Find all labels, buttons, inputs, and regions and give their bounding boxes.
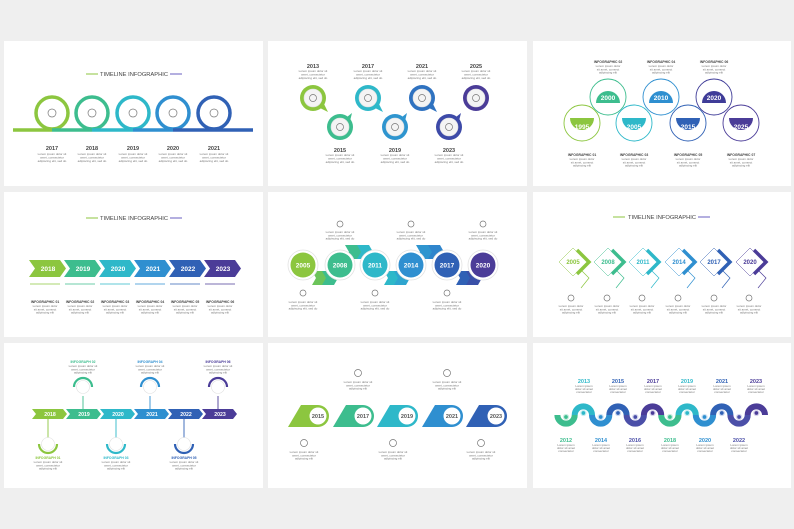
labels: sit amet, consect	[597, 67, 619, 71]
wave labels: consectetur	[576, 390, 592, 394]
icons and notes: adipiscing elit	[633, 311, 651, 315]
icons and notes: Lorem ipsum dolor	[737, 304, 761, 308]
title: TIMELINE INFOGRAPHIC	[628, 215, 696, 221]
icons and notes: adipiscing elit, sed do	[469, 237, 498, 241]
labels: INFOGRAPHIC 07	[727, 153, 755, 157]
wave labels: 2021	[716, 379, 728, 385]
wave labels: Lorem ipsum	[730, 443, 748, 447]
labels: adipiscing elit, sed do	[435, 160, 464, 164]
labels: adipiscing elit	[705, 71, 723, 75]
chevrons: 2022	[181, 266, 196, 273]
half discs with years: 2025	[734, 124, 749, 131]
icons and notes: amet, consectetur	[435, 383, 459, 387]
pin labels: Lorem ipsum dolor sit	[69, 364, 97, 368]
labels: 2015	[334, 148, 346, 154]
year circles: 2017	[440, 262, 455, 270]
labels: INFOGRAPHIC 03	[101, 300, 129, 304]
pin labels: INFOGRAPH 03	[103, 456, 129, 460]
labels: Lorem ipsum dolor sit	[408, 69, 436, 73]
year labels	[38, 146, 229, 163]
labels: 2023	[443, 148, 455, 154]
labels: 2017	[362, 64, 374, 70]
icons and notes	[559, 295, 761, 315]
year labels: adipiscing elit, sed do	[200, 159, 229, 163]
labels: INFOGRAPHIC 04	[136, 300, 164, 304]
icons and notes: Lorem ipsum dolor sit	[361, 300, 389, 304]
labels: sit amet, consect	[571, 160, 593, 164]
icons and notes: adipiscing elit	[598, 311, 616, 315]
labels: sit amet, consect	[139, 307, 161, 311]
pin labels	[34, 360, 232, 471]
labels: sit amet, consect	[623, 160, 645, 164]
labels: Lorem ipsum dolor	[622, 157, 646, 161]
wave labels: 2015	[612, 379, 624, 385]
labels: sit amet, consect	[650, 67, 672, 71]
year labels: Lorem ipsum dolor sit	[200, 152, 228, 156]
icons and notes: adipiscing elit, sed do	[289, 307, 318, 311]
labels: Lorem ipsum dolor sit	[354, 69, 382, 73]
icons and notes: adipiscing elit	[438, 387, 456, 391]
labels: adipiscing elit, sed do	[462, 76, 491, 80]
diamonds: 2011	[636, 260, 650, 266]
icons and notes: adipiscing elit, sed do	[361, 307, 390, 311]
labels: Lorem ipsum dolor	[676, 157, 700, 161]
chevrons: 2023	[216, 266, 231, 273]
wave labels: dolor sit amet	[609, 387, 627, 391]
year labels: adipiscing elit, sed do	[38, 159, 67, 163]
labels: adipiscing elit	[732, 164, 750, 168]
icons and notes: sit amet, consect	[596, 307, 618, 311]
tabs: 2021	[446, 414, 458, 420]
labels: adipiscing elit	[71, 311, 89, 315]
labels: adipiscing elit, sed do	[408, 76, 437, 80]
icons and notes: Lorem ipsum dolor	[666, 304, 690, 308]
labels: sit amet, consect	[174, 307, 196, 311]
labels: adipiscing elit	[573, 164, 591, 168]
icons and notes: Lorem ipsum dolor	[595, 304, 619, 308]
year circles: 2005	[296, 262, 311, 270]
labels: INFOGRAPHIC 05	[674, 153, 702, 157]
wave labels: Lorem ipsum	[609, 384, 627, 388]
labels: adipiscing elit	[211, 311, 229, 315]
half discs with years	[570, 91, 753, 131]
wave labels: dolor sit amet	[626, 446, 644, 450]
pin labels: Lorem ipsum dolor sit	[102, 460, 130, 464]
labels: adipiscing elit, sed do	[326, 160, 355, 164]
labels: Lorem ipsum dolor	[649, 64, 673, 68]
pin labels: amet, consectetur	[206, 367, 230, 371]
icons and notes: amet, consectetur	[363, 303, 387, 307]
year circles: 2008	[333, 262, 348, 270]
wave labels: consectetur	[645, 390, 661, 394]
connectors	[48, 396, 218, 440]
wave labels: consectetur	[593, 449, 609, 453]
labels: INFOGRAPHIC 06	[206, 300, 234, 304]
icons and notes: Lorem ipsum dolor sit	[397, 230, 425, 234]
labels: amet, consectetur	[383, 156, 407, 160]
labels: INFOGRAPHIC 01	[31, 300, 59, 304]
wave labels: dolor sit amet	[678, 387, 696, 391]
year labels: amet, consectetur	[202, 156, 226, 160]
labels: Lorem ipsum dolor sit	[462, 69, 490, 73]
icons and notes: Lorem ipsum dolor sit	[469, 230, 497, 234]
loop chain	[13, 97, 253, 130]
icons and notes: amet, consectetur	[346, 383, 370, 387]
labels: adipiscing elit	[625, 164, 643, 168]
wave labels: dolor sit amet	[730, 446, 748, 450]
tabs: 2019	[401, 414, 413, 420]
arrow strip	[32, 409, 237, 419]
wave	[557, 406, 765, 424]
tabs	[288, 405, 507, 427]
wave labels: Lorem ipsum	[661, 443, 679, 447]
labels: amet, consectetur	[410, 72, 434, 76]
wave labels: dolor sit amet	[592, 446, 610, 450]
wave labels: Lorem ipsum	[644, 384, 662, 388]
wave labels: 2013	[578, 379, 590, 385]
icons and notes: adipiscing elit	[705, 311, 723, 315]
diamonds: 2017	[707, 260, 721, 266]
wave labels: dolor sit amet	[644, 387, 662, 391]
icons and notes: sit amet, consect	[738, 307, 760, 311]
year circles	[288, 250, 498, 280]
labels: adipiscing elit	[599, 71, 617, 75]
labels: Lorem ipsum dolor	[570, 157, 594, 161]
icons and notes: adipiscing elit	[384, 457, 402, 461]
labels: amet, consectetur	[437, 156, 461, 160]
year labels: amet, consectetur	[161, 156, 185, 160]
labels: INFOGRAPHIC 06	[700, 60, 728, 64]
wave labels: Lorem ipsum	[575, 384, 593, 388]
labels: INFOGRAPHIC 01	[568, 153, 596, 157]
half discs with years: 2015	[681, 124, 696, 131]
wave labels: dolor sit amet	[713, 387, 731, 391]
labels: Lorem ipsum dolor	[596, 64, 620, 68]
labels: 2013	[307, 64, 319, 70]
panel: slanted tabs	[268, 343, 527, 488]
wave labels: consectetur	[731, 449, 747, 453]
arrow strip: 2020	[112, 412, 124, 418]
labels	[31, 300, 234, 315]
labels	[568, 60, 755, 168]
outline circles	[564, 79, 759, 141]
diamonds	[559, 248, 766, 288]
wave labels: dolor sit amet	[696, 446, 714, 450]
title	[86, 72, 182, 78]
year labels: Lorem ipsum dolor sit	[38, 152, 66, 156]
diamonds: 2014	[672, 260, 686, 266]
wave labels: consectetur	[662, 449, 678, 453]
icons and notes: Lorem ipsum dolor sit	[379, 450, 407, 454]
pins	[39, 378, 227, 453]
tabs: 2015	[312, 414, 324, 420]
arrows	[30, 283, 235, 285]
year labels: 2021	[208, 146, 220, 152]
arrow strip: 2023	[214, 412, 226, 418]
year labels: adipiscing elit, sed do	[119, 159, 148, 163]
pin labels: Lorem ipsum dolor sit	[170, 460, 198, 464]
labels: adipiscing elit, sed do	[299, 76, 328, 80]
year labels: amet, consectetur	[121, 156, 145, 160]
diamonds: 2020	[743, 260, 757, 266]
labels: Lorem ipsum dolor sit	[435, 153, 463, 157]
panel: chevron timeline	[4, 192, 263, 337]
year labels: adipiscing elit, sed do	[159, 159, 188, 163]
chevrons: 2018	[41, 266, 56, 273]
pin labels: amet, consectetur	[104, 463, 128, 467]
icons and notes: amet, consectetur	[399, 233, 423, 237]
year labels: Lorem ipsum dolor sit	[159, 152, 187, 156]
icons and notes: adipiscing elit	[562, 311, 580, 315]
labels: 2021	[416, 64, 428, 70]
pin labels: Lorem ipsum dolor sit	[136, 364, 164, 368]
icons and notes: Lorem ipsum dolor sit	[344, 380, 372, 384]
year labels: 2019	[127, 146, 139, 152]
labels: amet, consectetur	[356, 72, 380, 76]
wave labels: 2012	[560, 438, 572, 444]
labels: Lorem ipsum dolor	[138, 304, 162, 308]
arrow strip: 2022	[180, 412, 192, 418]
icons and notes: adipiscing elit	[669, 311, 687, 315]
labels: Lorem ipsum dolor sit	[326, 153, 354, 157]
labels: amet, consectetur	[328, 156, 352, 160]
icons and notes: Lorem ipsum dolor	[630, 304, 654, 308]
labels: Lorem ipsum dolor	[729, 157, 753, 161]
labels: Lorem ipsum dolor sit	[381, 153, 409, 157]
wave labels: 2018	[664, 438, 676, 444]
labels: INFOGRAPHIC 02	[66, 300, 94, 304]
labels: sit amet, consect	[677, 160, 699, 164]
icons and notes: amet, consectetur	[381, 453, 405, 457]
labels: Lorem ipsum dolor	[68, 304, 92, 308]
wave labels: consectetur	[697, 449, 713, 453]
icons and notes: amet, consectetur	[469, 453, 493, 457]
chevrons: 2019	[76, 266, 91, 273]
pin labels: adipiscing elit	[209, 371, 227, 375]
panel: timeline loops	[4, 41, 263, 186]
wave labels: consectetur	[679, 390, 695, 394]
wave labels: 2020	[699, 438, 711, 444]
title: TIMELINE INFOGRAPHIC	[100, 216, 168, 222]
arrow strip: 2019	[78, 412, 90, 418]
wave labels: consectetur	[748, 390, 764, 394]
labels: adipiscing elit	[176, 311, 194, 315]
wave labels: dolor sit amet	[557, 446, 575, 450]
labels: amet, consectetur	[464, 72, 488, 76]
pin labels: adipiscing elit	[107, 467, 125, 471]
icons and notes: adipiscing elit	[349, 387, 367, 391]
wave labels: consectetur	[610, 390, 626, 394]
icons and notes: sit amet, consect	[560, 307, 582, 311]
labels: adipiscing elit, sed do	[381, 160, 410, 164]
icons and notes: adipiscing elit, sed do	[397, 237, 426, 241]
icons and notes: Lorem ipsum dolor sit	[433, 300, 461, 304]
icons and notes: sit amet, consect	[667, 307, 689, 311]
labels: sit amet, consect	[69, 307, 91, 311]
year labels: 2017	[46, 146, 58, 152]
ribbon chevrons	[312, 245, 482, 285]
panel: arrow strip with pins	[4, 343, 263, 488]
panel: diamond timeline	[533, 192, 791, 337]
wave labels: 2016	[629, 438, 641, 444]
wave labels: consectetur	[714, 390, 730, 394]
wave labels: dolor sit amet	[575, 387, 593, 391]
panel: wave ribbon	[533, 343, 791, 488]
icons and notes: sit amet, consect	[703, 307, 725, 311]
wave labels	[557, 379, 765, 453]
badges	[300, 85, 489, 140]
pin labels: amet, consectetur	[71, 367, 95, 371]
pin labels: INFOGRAPH 05	[171, 456, 197, 460]
year labels: 2020	[167, 146, 179, 152]
icons and notes: amet, consectetur	[471, 233, 495, 237]
icons and notes	[289, 221, 498, 311]
arrow strip: 2021	[146, 412, 158, 418]
panel: zigzag badges	[268, 41, 527, 186]
wave labels: dolor sit amet	[661, 446, 679, 450]
icons and notes: adipiscing elit, sed do	[433, 307, 462, 311]
wave labels: consectetur	[627, 449, 643, 453]
labels: sit amet, consect	[209, 307, 231, 311]
icons and notes: amet, consectetur	[435, 303, 459, 307]
icons and notes: adipiscing elit	[295, 457, 313, 461]
icons and notes: Lorem ipsum dolor sit	[467, 450, 495, 454]
pin labels: amet, consectetur	[172, 463, 196, 467]
pin labels: INFOGRAPH 06	[205, 360, 231, 364]
pin labels: INFOGRAPH 02	[70, 360, 96, 364]
labels: Lorem ipsum dolor	[33, 304, 57, 308]
labels: Lorem ipsum dolor	[702, 64, 726, 68]
wave labels: 2019	[681, 379, 693, 385]
wave labels: Lorem ipsum	[557, 443, 575, 447]
labels: sit amet, consect	[703, 67, 725, 71]
labels: 2019	[389, 148, 401, 154]
tabs: 2023	[490, 414, 502, 420]
diamonds: 2008	[601, 260, 615, 266]
year circles: 2011	[368, 262, 382, 270]
icons and notes: amet, consectetur	[292, 453, 316, 457]
icons and notes: Lorem ipsum dolor sit	[326, 230, 354, 234]
half discs with years: 2005	[627, 124, 642, 131]
icons and notes: Lorem ipsum dolor	[702, 304, 726, 308]
pin labels: adipiscing elit	[74, 371, 92, 375]
labels: Lorem ipsum dolor	[173, 304, 197, 308]
half discs with years: 2020	[707, 95, 722, 102]
labels: adipiscing elit	[106, 311, 124, 315]
labels: sit amet, consect	[730, 160, 752, 164]
pin labels: adipiscing elit	[141, 371, 159, 375]
labels: sit amet, consect	[34, 307, 56, 311]
labels: adipiscing elit, sed do	[354, 76, 383, 80]
year labels: amet, consectetur	[80, 156, 104, 160]
icons and notes: amet, consectetur	[328, 233, 352, 237]
labels: INFOGRAPHIC 03	[620, 153, 648, 157]
wave labels: 2014	[595, 438, 608, 444]
icons and notes: Lorem ipsum dolor sit	[433, 380, 461, 384]
title	[86, 216, 182, 222]
labels: INFOGRAPHIC 02	[594, 60, 622, 64]
labels: INFOGRAPHIC 04	[647, 60, 675, 64]
diamonds: 2005	[566, 260, 580, 266]
wave labels: 2022	[733, 438, 745, 444]
panel: wave circles with half discs	[533, 41, 791, 186]
wave labels: consectetur	[558, 449, 574, 453]
arrow strip: 2018	[44, 412, 56, 418]
pin labels: Lorem ipsum dolor sit	[34, 460, 62, 464]
icons and notes: Lorem ipsum dolor sit	[290, 450, 318, 454]
pin labels: INFOGRAPH 04	[137, 360, 163, 364]
chevrons: 2020	[111, 266, 126, 273]
labels: Lorem ipsum dolor	[103, 304, 127, 308]
labels: INFOGRAPHIC 05	[171, 300, 199, 304]
wave labels: Lorem ipsum	[678, 384, 696, 388]
labels: 2025	[470, 64, 482, 70]
year labels: adipiscing elit, sed do	[78, 159, 107, 163]
tabs: 2017	[357, 414, 369, 420]
icons and notes: Lorem ipsum dolor	[559, 304, 583, 308]
year circles: 2020	[476, 262, 491, 270]
wave dots	[564, 410, 759, 420]
chevrons: 2021	[146, 266, 161, 273]
icons and notes	[290, 370, 496, 461]
icons and notes: adipiscing elit, sed do	[326, 237, 355, 241]
wave labels: dolor sit amet	[747, 387, 765, 391]
wave labels: Lorem ipsum	[747, 384, 765, 388]
half discs with years: 2000	[601, 95, 616, 102]
year labels: 2018	[86, 146, 98, 152]
labels: Lorem ipsum dolor	[208, 304, 232, 308]
pin labels: amet, consectetur	[36, 463, 60, 467]
wave labels: Lorem ipsum	[626, 443, 644, 447]
year labels: amet, consectetur	[40, 156, 64, 160]
labels: adipiscing elit	[679, 164, 697, 168]
wave labels: Lorem ipsum	[696, 443, 714, 447]
wave labels: Lorem ipsum	[592, 443, 610, 447]
pin labels: amet, consectetur	[138, 367, 162, 371]
labels: Lorem ipsum dolor sit	[299, 69, 327, 73]
labels	[299, 64, 491, 164]
half discs with years: 2010	[654, 95, 669, 102]
year labels: Lorem ipsum dolor sit	[119, 152, 147, 156]
panel: circles on chevron ribbon	[268, 192, 527, 337]
labels: adipiscing elit	[141, 311, 159, 315]
year labels: Lorem ipsum dolor sit	[78, 152, 106, 156]
icons and notes: sit amet, consect	[631, 307, 653, 311]
wave labels: 2017	[647, 379, 659, 385]
pin labels: Lorem ipsum dolor sit	[204, 364, 232, 368]
wave labels: Lorem ipsum	[713, 384, 731, 388]
icons and notes: adipiscing elit	[472, 457, 490, 461]
year circles: 2014	[404, 262, 419, 270]
icons and notes: adipiscing elit	[740, 311, 758, 315]
half discs with years: 1995	[575, 124, 590, 131]
labels: sit amet, consect	[104, 307, 126, 311]
pin labels: adipiscing elit	[39, 467, 57, 471]
pin labels: adipiscing elit	[175, 467, 193, 471]
icons and notes: Lorem ipsum dolor sit	[289, 300, 317, 304]
title: TIMELINE INFOGRAPHIC	[100, 72, 168, 78]
chevrons	[29, 260, 241, 277]
wave labels: 2023	[750, 379, 762, 385]
icons and notes: amet, consectetur	[291, 303, 315, 307]
labels: amet, consectetur	[301, 72, 325, 76]
labels: adipiscing elit	[652, 71, 670, 75]
labels: adipiscing elit	[36, 311, 54, 315]
title	[613, 215, 710, 221]
pin labels: INFOGRAPH 01	[35, 456, 61, 460]
